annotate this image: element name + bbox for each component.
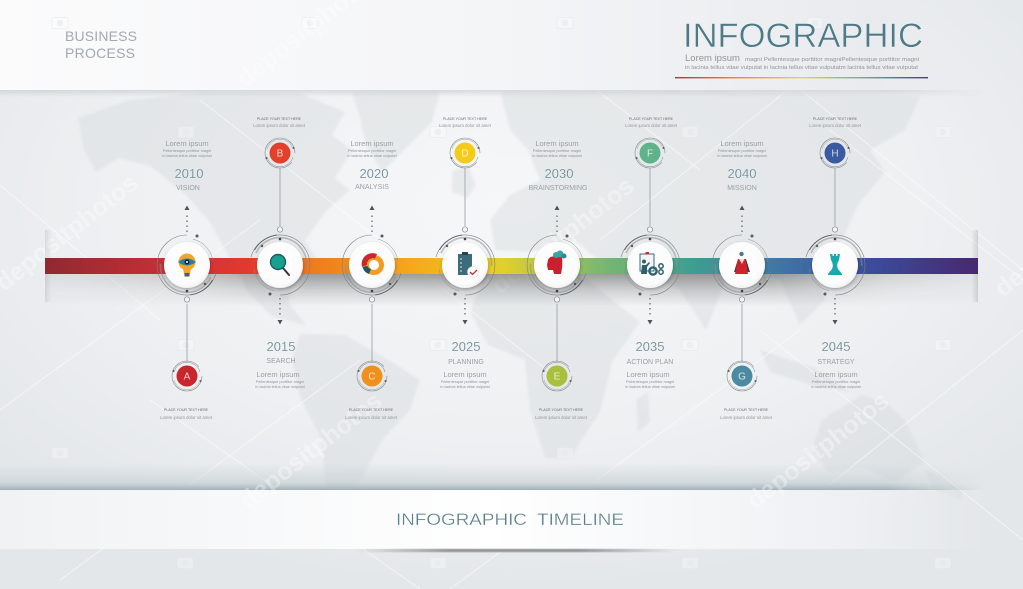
- text block 2030 brainstorming: in lacinia tellus vitae vulputat: [532, 153, 583, 158]
- caption B: [253, 117, 306, 128]
- bottom band shadow: [0, 469, 973, 490]
- icon: head with cloud: [547, 250, 566, 274]
- node 2010 vision: [157, 234, 216, 295]
- caption A: PLACE YOUR TEXT HERE: [164, 408, 209, 412]
- text block 2015 search: in lacinia tellus vitae vulputat: [255, 384, 306, 389]
- heading: business process: PROCESS: [65, 45, 135, 61]
- caption D: [439, 117, 492, 128]
- node 2015 search: [251, 235, 310, 296]
- text block 2040 mission: 2040: [728, 166, 756, 181]
- node 2035 action plan: [621, 235, 680, 296]
- text block 2045 strategy: Lorem ipsum: [814, 370, 858, 379]
- text block 2010 vision: Lorem ipsum: [165, 139, 209, 148]
- heading: business process: [65, 28, 137, 61]
- timeline bar: [45, 258, 978, 274]
- text block 2025 planning: [440, 339, 491, 389]
- text block 2025 planning: Pellentesque porttitor magni: [441, 379, 489, 384]
- text block 2030 brainstorming: BRAINSTORMING: [528, 185, 588, 192]
- caption A: Lorem ipsum dolor sit amet: [160, 415, 213, 420]
- caption G: Lorem ipsum dolor sit amet: [720, 415, 773, 420]
- timeline bar shadow: [45, 230, 978, 306]
- icon: mission figure: [734, 252, 750, 274]
- title subtext: [685, 53, 919, 71]
- text block 2015 search: Lorem ipsum: [256, 370, 300, 379]
- caption F: [625, 117, 678, 128]
- text block 2045 strategy: STRATEGY: [817, 359, 855, 366]
- circle F: [635, 138, 665, 168]
- text block 2030 brainstorming: 2030: [545, 166, 573, 181]
- caption B: PLACE YOUR TEXT HERE: [257, 117, 302, 121]
- circle H: H: [831, 149, 839, 160]
- text block 2025 planning: 2025: [452, 339, 480, 354]
- caption A: [160, 408, 213, 420]
- caption F: PLACE YOUR TEXT HERE: [629, 117, 674, 121]
- heading: business process: BUSINESS: [65, 28, 137, 44]
- circle C: [357, 361, 387, 391]
- caption H: [809, 117, 862, 128]
- text block 2030 brainstorming: Pellentesque porttitor magni: [533, 148, 581, 153]
- circle A: [172, 361, 202, 391]
- node 2020 analysis: [342, 234, 401, 295]
- text block 2025 planning: in lacinia tellus vitae vulputat: [440, 384, 491, 389]
- watermark text: depositphotos: [486, 172, 639, 300]
- caption B: Lorem ipsum dolor sit amet: [253, 123, 306, 128]
- text block 2015 search: [255, 339, 306, 389]
- text block 2035 action plan: 2035: [636, 339, 664, 354]
- text block 2020 analysis: Lorem ipsum: [350, 139, 394, 148]
- icon: chess piece: [828, 254, 842, 275]
- connectors and arrows: [184, 168, 838, 362]
- caption H: PLACE YOUR TEXT HERE: [813, 117, 858, 121]
- circle E: E: [554, 372, 561, 383]
- watermark text: depositphotos: [741, 387, 894, 515]
- text block 2020 analysis: in lacinia tellus vitae vulputat: [347, 153, 398, 158]
- node 2030 brainstorming: [527, 234, 586, 295]
- caption G: PLACE YOUR TEXT HERE: [724, 408, 769, 412]
- icon: presenter with gears: [640, 252, 663, 275]
- circle G: [727, 361, 757, 391]
- text block 2040 mission: in lacinia tellus vitae vulputat: [717, 153, 768, 158]
- icon: light bulb with eye: [178, 254, 196, 276]
- text block 2040 mission: [717, 139, 768, 192]
- text block 2030 brainstorming: Lorem ipsum: [535, 139, 579, 148]
- text block 2015 search: 2015: [267, 339, 295, 354]
- text block 2040 mission: Lorem ipsum: [720, 139, 764, 148]
- header panel: [0, 0, 990, 97]
- text block 2035 action plan: Pellentesque porttitor magni: [626, 379, 674, 384]
- node 2045 strategy: [806, 235, 865, 296]
- node 2025 planning: [436, 235, 495, 296]
- circle D: [450, 138, 480, 168]
- circle C: C: [368, 372, 376, 383]
- caption C: [345, 408, 398, 420]
- text block 2025 planning: Lorem ipsum: [443, 370, 487, 379]
- rainbow rule: [675, 77, 928, 78]
- text block 2045 strategy: [811, 339, 862, 389]
- text block 2045 strategy: Pellentesque porttitor magni: [812, 379, 860, 384]
- text block 2030 brainstorming: [528, 139, 588, 192]
- title subtext: Lorem ipsum: [685, 53, 740, 64]
- text block 2040 mission: MISSION: [727, 185, 757, 192]
- caption E: PLACE YOUR TEXT HERE: [539, 408, 584, 412]
- world map silhouette: [78, 90, 965, 532]
- caption E: Lorem ipsum dolor sit amet: [535, 415, 588, 420]
- text block 2035 action plan: in lacinia tellus vitae vulputat: [625, 384, 676, 389]
- text block 2025 planning: PLANNING: [448, 359, 484, 366]
- caption C: PLACE YOUR TEXT HERE: [349, 408, 394, 412]
- text block 2045 strategy: in lacinia tellus vitae vulputat: [811, 384, 862, 389]
- text block 2010 vision: VISION: [176, 185, 200, 192]
- text block 2020 analysis: ANALYSIS: [355, 184, 389, 191]
- text block 2010 vision: Pellentesque porttitor magni: [163, 148, 211, 153]
- text block 2040 mission: Pellentesque porttitor magni: [718, 148, 766, 153]
- caption C: Lorem ipsum dolor sit amet: [345, 415, 398, 420]
- circle E: [542, 361, 572, 391]
- icon: donut chart: [362, 253, 382, 274]
- text block 2015 search: SEARCH: [266, 358, 296, 365]
- text block 2035 action plan: [625, 339, 676, 389]
- caption F: Lorem ipsum dolor sit amet: [625, 123, 678, 128]
- bottom panel: [0, 490, 985, 549]
- circle D: D: [461, 149, 469, 160]
- text block 2010 vision: [162, 139, 213, 192]
- text block 2020 analysis: [347, 139, 398, 191]
- circle H: [820, 138, 850, 168]
- title subtext: magni Pellentesque porttitor magniPellentesque porttitor magni: [745, 57, 919, 63]
- watermark text: depositphotos: [234, 387, 387, 515]
- caption D: Lorem ipsum dolor sit amet: [439, 123, 492, 128]
- node 2040 mission: [712, 234, 771, 295]
- bottom panel shadow: [355, 549, 675, 552]
- icon: clipboard with check: [458, 252, 478, 278]
- text block 2010 vision: in lacinia tellus vitae vulputat: [162, 153, 213, 158]
- text block 2035 action plan: Lorem ipsum: [626, 370, 670, 379]
- title: infographic: INFOGRAPHIC: [683, 17, 923, 55]
- text block 2015 search: Pellentesque porttitor magni: [256, 379, 304, 384]
- caption G: [720, 408, 773, 420]
- circle A: A: [184, 372, 191, 383]
- caption D: PLACE YOUR TEXT HERE: [443, 117, 488, 121]
- caption H: Lorem ipsum dolor sit amet: [809, 123, 862, 128]
- text block 2035 action plan: ACTION PLAN: [627, 359, 673, 366]
- icon: magnifier: [270, 254, 289, 275]
- text block 2010 vision: 2010: [175, 166, 203, 181]
- circle F: F: [647, 149, 653, 160]
- title subtext: in lacinia tellus vitae vulputat in lacinia tellus vitae vulputatm lacinia tellus vitae vulputat: [685, 65, 919, 71]
- circle B: B: [277, 149, 284, 160]
- circle B: [265, 138, 295, 168]
- text block 2045 strategy: 2045: [822, 339, 850, 354]
- text block 2020 analysis: 2020: [360, 166, 388, 181]
- circle G: G: [738, 372, 746, 383]
- bottom heading: INFOGRAPHIC TIMELINE: [396, 510, 624, 529]
- caption E: [535, 408, 588, 420]
- text block 2020 analysis: Pellentesque porttitor magni: [348, 148, 396, 153]
